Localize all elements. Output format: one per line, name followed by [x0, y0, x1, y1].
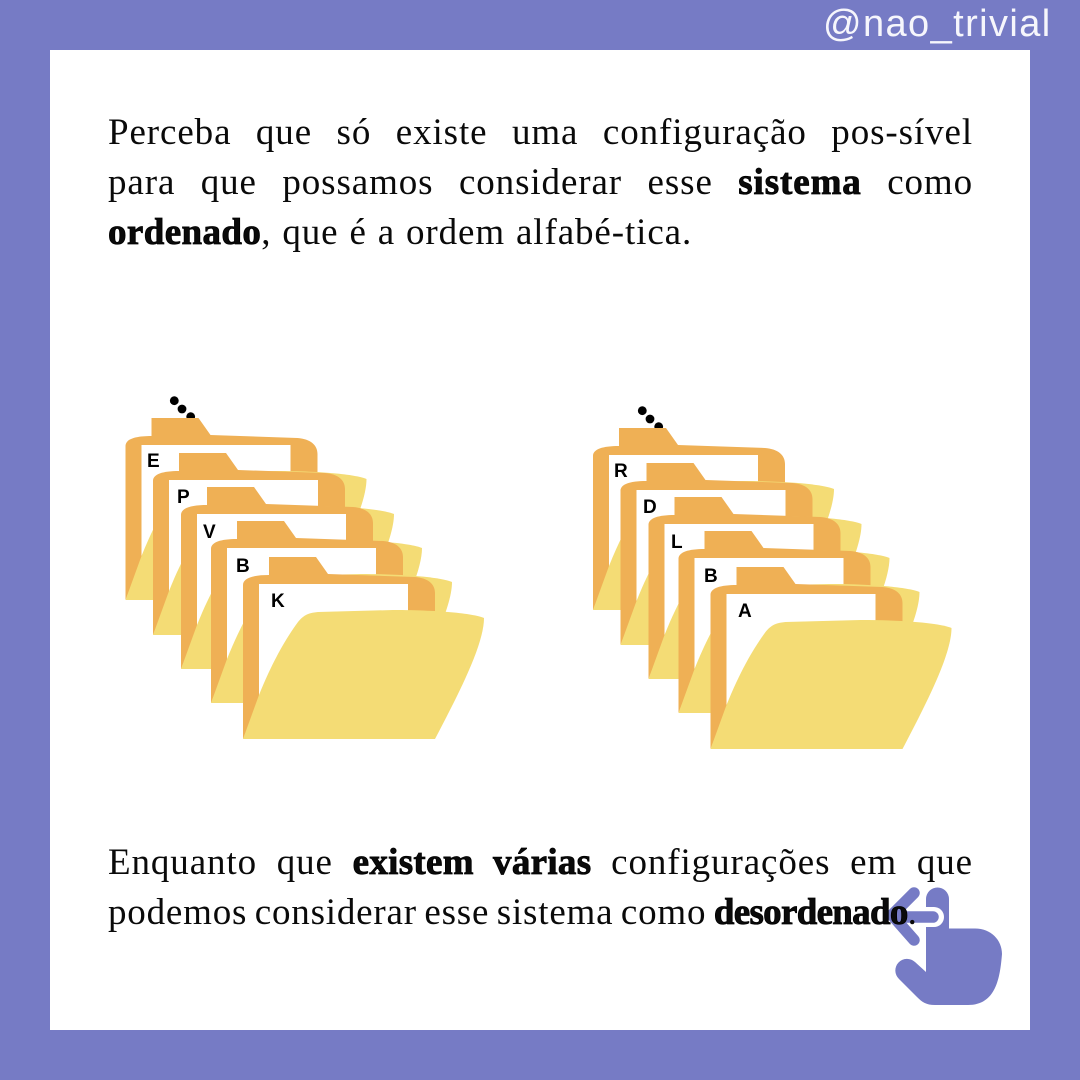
- folder B: B: [704, 566, 718, 587]
- text block: conclusion: Enquanto que existem várias configurações em que: [108, 842, 973, 883]
- folder stack: left: [126, 396, 484, 739]
- folder D: D: [643, 497, 657, 518]
- text block: intro: ordenado, que é a ordem alfabé-tica.: [108, 212, 692, 253]
- folder L: [648, 497, 890, 679]
- folder R: [593, 428, 834, 610]
- folder P: P: [177, 487, 190, 508]
- folder P: [153, 453, 394, 635]
- folder B: [678, 531, 920, 713]
- folder K: K: [271, 591, 285, 612]
- folder B: [211, 521, 452, 703]
- folder A: [710, 567, 952, 749]
- dots: [638, 406, 663, 431]
- folder A: A: [738, 601, 752, 622]
- folder V: [181, 487, 422, 669]
- text block: intro: para que possamos considerar esse sistema como: [108, 162, 973, 203]
- icon: swipe left hand: [892, 888, 1002, 1005]
- folder D: [620, 463, 862, 645]
- text block: conclusion: podemos considerar esse sistema como desordenado.: [108, 892, 918, 933]
- folder R: R: [614, 461, 628, 482]
- folder E: E: [147, 451, 160, 472]
- folder K: [243, 557, 484, 739]
- text block: conclusion: [108, 842, 973, 933]
- dots: [170, 396, 195, 421]
- handle: @nao_trivial: [823, 3, 1052, 45]
- folder E: [126, 418, 366, 600]
- folder L: L: [671, 532, 683, 553]
- folder stack: right: [593, 406, 952, 749]
- folder B: B: [236, 556, 250, 577]
- text block: intro: [108, 112, 973, 253]
- folder V: V: [203, 522, 216, 543]
- text block: intro: Perceba que só existe uma configuração pos-sível: [108, 112, 973, 153]
